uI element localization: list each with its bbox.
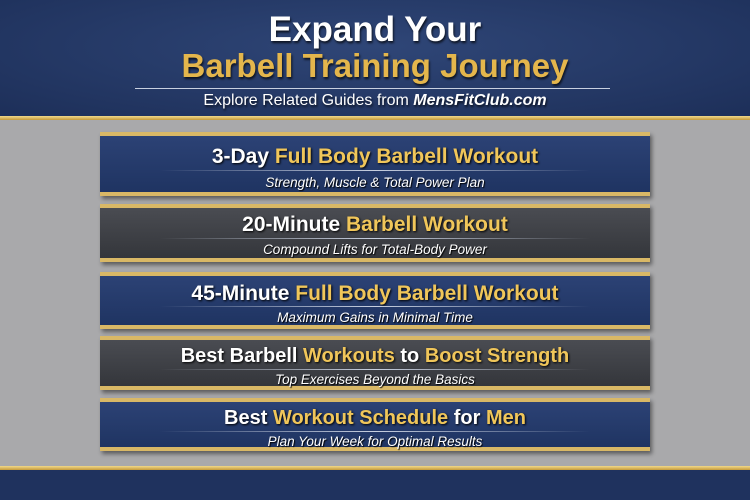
title: Expand Your: [269, 10, 481, 49]
card 2: [100, 204, 650, 262]
card 4: Best Barbell Workouts to Boost Strength: [181, 345, 569, 367]
card 4: [100, 336, 650, 390]
card 1: 3-Day Full Body Barbell Workout: [212, 145, 538, 168]
card 2: Compound Lifts for Total-Body Power: [263, 242, 487, 257]
card 5: [100, 398, 650, 451]
title line 2: Barbell Training Journey: [182, 47, 568, 84]
card 1: [100, 132, 650, 196]
subtitle: Explore Related Guides from MensFitClub.com: [203, 92, 547, 109]
card 5: Best Workout Schedule for Men: [224, 407, 526, 429]
card 5: Plan Your Week for Optimal Results: [268, 434, 482, 449]
card 4: Top Exercises Beyond the Basics: [275, 372, 475, 387]
card 1: Strength, Muscle & Total Power Plan: [265, 175, 485, 190]
card 2: 20-Minute Barbell Workout: [242, 213, 508, 236]
card 3: Maximum Gains in Minimal Time: [277, 310, 473, 325]
card 3: [100, 272, 650, 329]
header: [0, 0, 750, 116]
card 3: 45-Minute Full Body Barbell Workout: [191, 282, 559, 305]
